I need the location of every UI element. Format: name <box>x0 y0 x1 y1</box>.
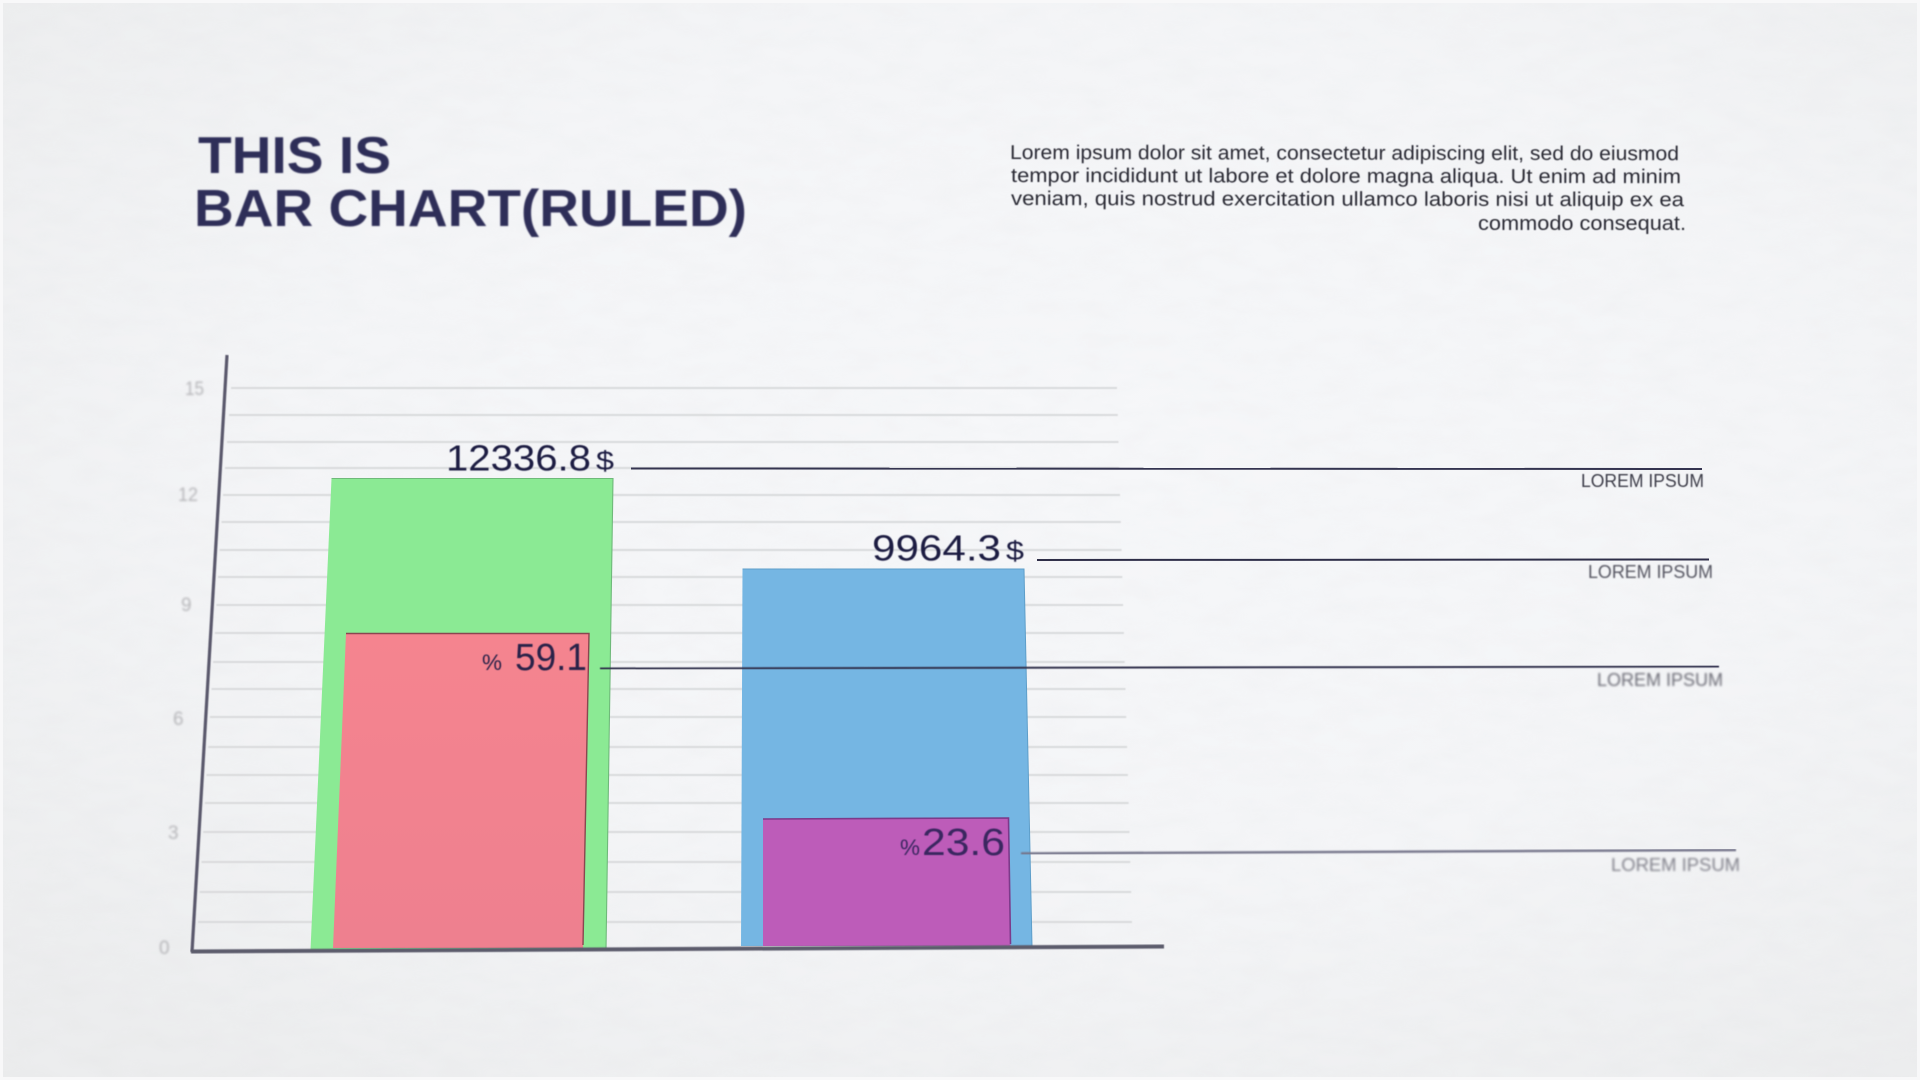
label 4: LOREM IPSUM <box>1611 855 1740 875</box>
x axis line <box>191 946 1164 952</box>
title line 2: BAR CHART(RULED) <box>194 180 747 238</box>
leader 3 <box>600 666 1719 668</box>
label 1: LOREM IPSUM <box>1581 471 1704 491</box>
value 23.6: 23.6 <box>922 822 1005 864</box>
paragraph line 4: commodo consequat. <box>1478 213 1686 235</box>
label 3: LOREM IPSUM <box>1597 670 1723 690</box>
ruled grid lines <box>198 388 1132 922</box>
label 2: LOREM IPSUM <box>1588 562 1713 582</box>
bar: purple share <box>763 818 1010 946</box>
value 12336.8: 12336.8 <box>446 438 591 478</box>
callout: purple bar value <box>900 822 1005 864</box>
value 9964.3: 9964.3 <box>872 528 1001 568</box>
percent sign: % <box>900 835 920 860</box>
tick 6: 6 <box>173 709 184 730</box>
tick 0: 0 <box>159 938 170 959</box>
red bar edges <box>346 634 589 945</box>
purple bar top edge <box>763 818 1010 944</box>
callout: green bar value <box>446 438 614 478</box>
dollar sign: $ <box>596 446 614 476</box>
bar chart <box>159 355 1740 959</box>
leader line and label 4 <box>1021 850 1740 875</box>
blue bar edges <box>742 569 1032 946</box>
tick 15: 15 <box>185 379 204 400</box>
paragraph line 1: Lorem ipsum dolor sit amet, consectetur adipiscing elit, sed do eiusmod <box>1010 142 1679 165</box>
paragraph line 2: tempor incididunt ut labore et dolore magna aliqua. Ut enim ad minim <box>1011 165 1681 188</box>
tick 12: 12 <box>178 485 198 506</box>
value 59.1: 59.1 <box>515 637 587 679</box>
y-axis labels <box>159 379 204 959</box>
leader 2 <box>1037 558 1709 561</box>
bar: blue total <box>741 569 1032 946</box>
title line 1: THIS IS <box>198 127 391 185</box>
y axis line <box>192 355 227 952</box>
green bar edges <box>332 478 613 950</box>
tick 3: 3 <box>168 823 179 844</box>
tick 9: 9 <box>181 595 192 616</box>
leader 4 <box>1021 850 1736 854</box>
bar: red share <box>333 633 589 948</box>
title <box>194 127 747 238</box>
leader 1 <box>631 468 1702 470</box>
bar: green total <box>310 478 613 950</box>
description paragraph <box>1010 142 1686 235</box>
callout: blue bar value <box>872 528 1024 568</box>
dollar sign: $ <box>1006 536 1024 566</box>
percent sign: % <box>482 650 502 675</box>
paragraph line 3: veniam, quis nostrud exercitation ullamco laboris nisi ut aliquip ex ea <box>1011 188 1685 211</box>
callout: red bar value <box>482 637 587 679</box>
